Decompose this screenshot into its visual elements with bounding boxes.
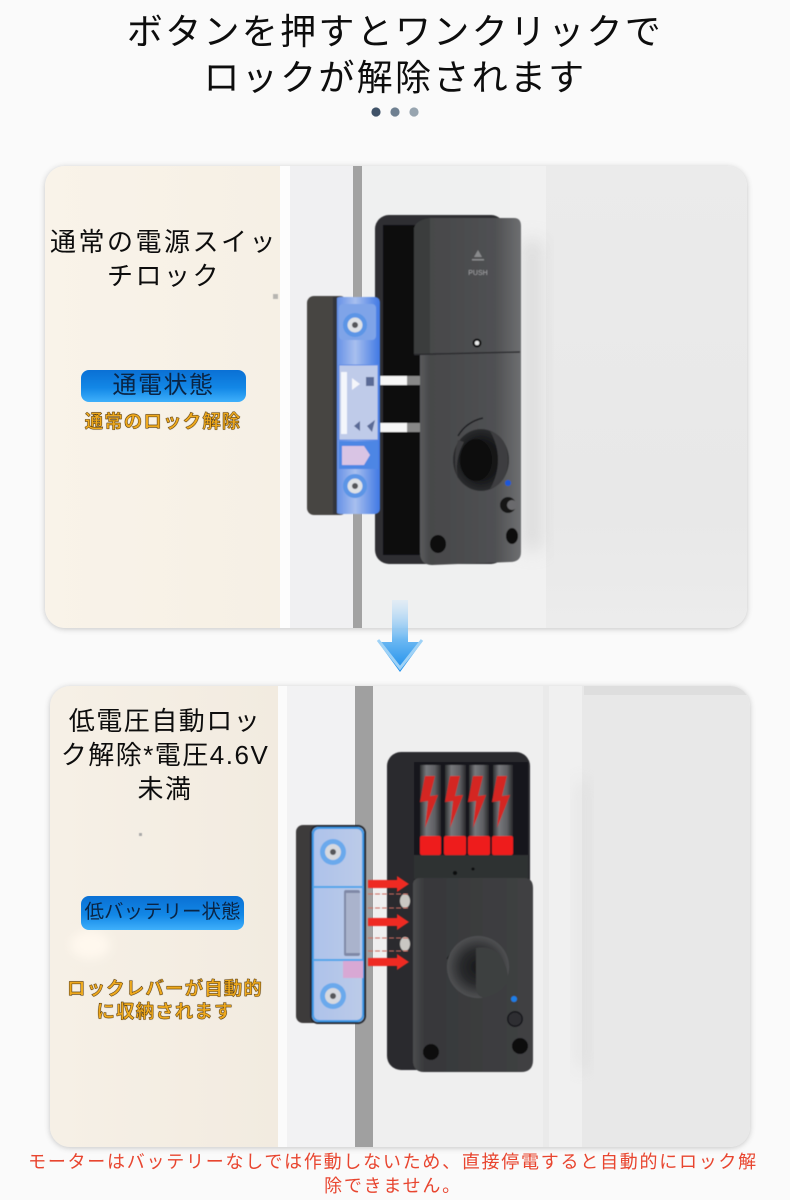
title: [127, 11, 663, 98]
icon: lock body: [375, 215, 521, 565]
status button: low battery: 低バッテリー状態: [84, 901, 240, 923]
status button: powered: 通電状態: [112, 372, 214, 399]
status note: lever retracts: ロックレバーが自動的: [67, 978, 263, 999]
status note: lever retracts: [67, 978, 263, 1022]
icon: door strike plate: [307, 296, 380, 515]
status note: lever retracts: に収納されます: [96, 1001, 234, 1022]
heading: low voltage auto unlock: 未満: [137, 774, 192, 804]
heading: low voltage auto unlock: 低電圧自動ロッ: [69, 706, 261, 736]
heading: normal lock: 通常の電源スイッ: [50, 227, 278, 257]
heading: low voltage auto unlock: ク解除*電圧4.6V: [61, 740, 269, 770]
heading: normal lock: チロック: [107, 261, 221, 291]
footnote: モーターはバッテリーなしでは作動しないため、直接停電すると自動的にロック解: [28, 1152, 758, 1172]
status button: powered: [81, 370, 246, 402]
photo: door with powered lock: [45, 166, 747, 628]
icon: red arrows: [368, 876, 409, 970]
footnote: 除できません。: [324, 1176, 462, 1196]
arrow: down: [376, 600, 424, 672]
status button: low battery: [81, 896, 244, 930]
icon: lock body with batteries: [387, 752, 533, 1072]
icon: lock body: PUSH: [468, 270, 488, 277]
status note: normal unlock: 通常のロック解除: [85, 411, 241, 432]
photo: door with low battery lock: [50, 686, 750, 1147]
speck: [273, 294, 278, 299]
heading: low voltage auto unlock: [61, 706, 269, 804]
carousel dots: [371, 107, 419, 117]
title: ボタンを押すとワンクリックで: [127, 11, 663, 52]
footnote: [28, 1152, 758, 1196]
heading: normal lock: [50, 227, 278, 291]
panel: low battery state: [50, 686, 750, 1147]
glow under button: [70, 931, 110, 959]
speck: [139, 833, 142, 836]
title: ロックが解除されます: [203, 57, 586, 98]
panel: normal power state: [45, 166, 747, 628]
icon: door strike plate: [296, 825, 365, 1023]
